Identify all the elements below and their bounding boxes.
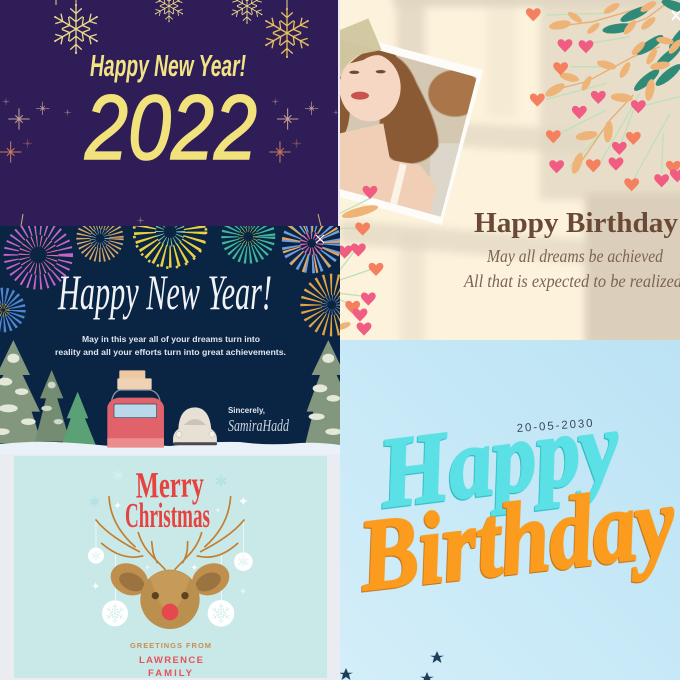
signature: Samira Hadd: SamiraHadd [228,416,289,435]
firework: tan [83,222,117,255]
heading: Happy: Happy [372,389,625,529]
icon: close mark [316,235,324,243]
small snowflakes and sparkles [89,470,248,594]
heading: Christmas: Christmas [125,496,210,535]
red van with luggage [107,370,217,448]
pine trees [0,340,353,446]
tree middle [35,370,70,442]
tree right [306,340,340,445]
fireworks [0,196,352,326]
panel: purple new year card [0,0,339,226]
message line 2: reality and all your efforts turn into great achievements. [55,347,286,357]
heading: Happy Birthday: Happy Birthday [474,208,678,239]
panel: christmas card [0,454,340,680]
ornament strings [96,520,243,602]
firework: multicolour [291,223,332,264]
decorative sparkles [0,98,339,224]
panel: birthday photo card [330,0,680,347]
window shadows [340,0,680,347]
orange leaves [335,0,680,331]
watercolour flowers top right [335,0,680,336]
date: 20-05-2030 [516,418,593,435]
eyes [152,592,189,599]
text: Lawrence: LAWRENCE [139,655,203,666]
left ear [105,557,153,601]
nose [162,604,178,620]
head [140,570,200,629]
photo frame [340,32,483,225]
luggage [117,370,152,390]
divider strip [338,0,340,226]
photo print [340,18,484,225]
stars [339,651,444,680]
firework: teal [230,218,267,255]
snow ground [0,442,340,454]
signature: Sincerely: Sincerely, [228,405,265,415]
green leaves [602,0,680,94]
white beetle [173,407,217,443]
reindeer illustration [88,470,253,629]
hanging ornaments [88,548,253,627]
message line 1: May in this year all of your dreams turn into [82,334,260,344]
portrait of a woman [340,50,476,216]
van body [107,398,164,447]
firework: gold [311,284,352,326]
heading: Happy New Year: Happy New Year! [90,48,246,83]
tree left [0,340,42,443]
tree green [62,392,96,446]
heading: 2022: 2022 [84,77,257,179]
hanging gold snowflakes [21,0,321,226]
heading: Happy New Year script: Happy New Year! [57,264,272,320]
icon: close mark [672,11,680,20]
heart buds [345,8,680,314]
firework: yellow [132,226,208,269]
panel: navy new year card [0,196,353,454]
antlers [96,497,244,569]
panel: blue birthday card [339,340,680,680]
right ear [187,557,235,601]
firework: blue [0,296,17,324]
text: greetings from: GREETINGS FROM [130,641,211,650]
masking tape [340,18,382,72]
heading: Merry: Merry [135,464,204,507]
stems [340,13,680,305]
text: Family: FAMILY [148,668,193,679]
firework: pink [11,228,66,282]
